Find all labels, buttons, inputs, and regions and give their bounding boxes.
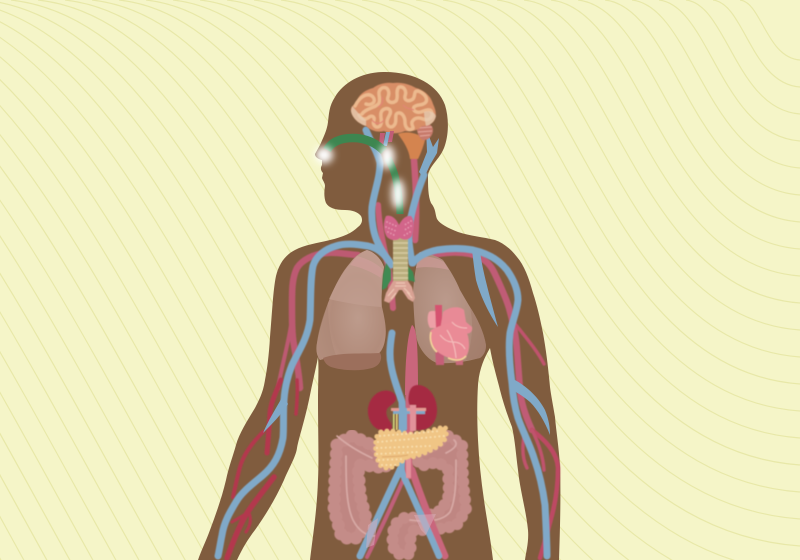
dark arteries: left forearm [227,380,297,558]
pancreas [376,427,446,478]
translucent colon overlay [366,514,436,548]
lung: left upper lobe [329,250,384,307]
pancreas: duct [382,455,408,457]
artery: neck left [378,205,393,308]
artery: right arm lower [532,430,558,558]
brain: pale side patches [351,106,436,126]
lungs [316,250,486,370]
body silhouette [198,72,560,560]
glow: throat [392,179,404,209]
vein: right leg [401,470,439,556]
glow: nose [315,146,333,164]
pancreas lower vessels [406,458,411,478]
veins crossing colon [360,470,445,557]
brain [351,83,436,159]
veins: blue vessels [218,130,547,556]
heart: body [430,322,469,360]
trachea [393,238,408,283]
vein stub under brain [383,132,390,146]
colon [334,436,466,554]
thyroid [384,216,414,240]
heart: great vessels [440,307,472,334]
heart: coronary vessels [440,322,467,358]
artery: neck right [414,160,416,240]
olfactory nerve: green [327,138,384,151]
vein: neck right [409,175,424,263]
colon: right transverse, descending and sigmoid [392,436,466,554]
arteries: pink vessels [278,160,558,558]
brainstem [398,132,425,159]
cerebrum [351,83,436,133]
colon: band lines [337,436,456,536]
trachea and thyroid [382,216,415,303]
vein: left leg [360,470,400,556]
artery: right arm [423,253,532,430]
bronchi [384,281,415,303]
vein: neck left [366,130,391,265]
vein: vena cava [390,333,402,473]
heart: apex stub [455,356,463,365]
heart: coronary fat [430,332,466,360]
pancreas: body fill [376,427,446,468]
artery: right leg [412,470,445,556]
vein: right subclavian and arm [413,248,547,556]
lung: top highlight band [350,256,449,278]
brain: red vessels [372,97,414,123]
artery: aorta lower [409,395,410,475]
renal vessels [391,405,426,431]
heart: aorta stem [435,305,442,328]
artery: left leg branch [367,478,404,557]
colon: ascending and left transverse [334,436,390,538]
vein: head top right jagged branch [419,128,439,178]
artery: right arm forks [516,325,544,470]
vessel stubs under brain [379,131,394,146]
vein: subclavian and left arm [218,244,391,556]
cerebellum [417,123,433,140]
artery: left arm branch [278,325,291,388]
heart [428,305,472,365]
heart: lower pulmonary stub [435,346,444,365]
lung: left [316,250,386,360]
vein: left arm tapered branch [263,396,288,433]
lung: diaphragm left [323,353,381,370]
artery: left arm [292,253,358,388]
kidney: left [368,390,396,431]
pancreas: lobule dots [377,431,444,465]
heart: left lumps [428,311,438,328]
nerve: green neck [388,158,400,214]
artery: aorta upper [405,325,418,395]
kidney: right [408,385,437,430]
glow: nerve junction [380,145,394,169]
lung: left side lobe [317,303,336,360]
lung: right [413,252,486,363]
kidneys [368,385,437,431]
lung: right side lobe [466,307,486,360]
brain: gyri ridges [355,87,432,130]
bronchial green [382,263,415,290]
vein: right arm tapered branches [472,250,550,435]
